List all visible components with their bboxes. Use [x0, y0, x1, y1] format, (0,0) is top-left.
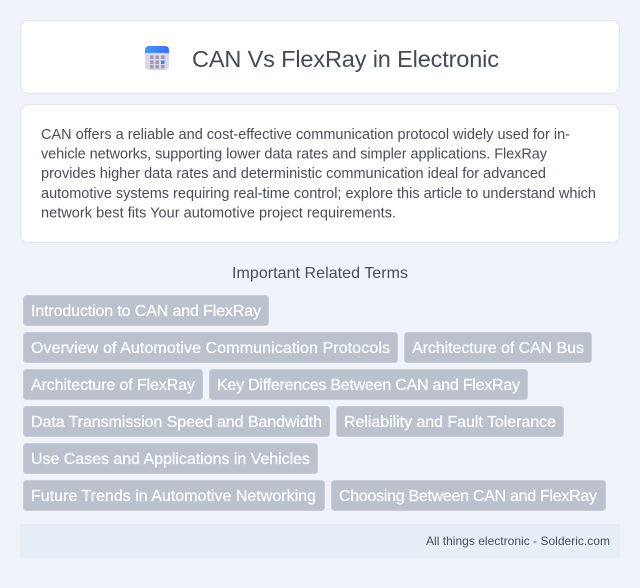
footer — [20, 524, 620, 558]
panel: summary paragraph: network best fits Your automotive project requirements. — [41, 205, 396, 221]
related terms tags: Introduction to CAN and FlexRay — [31, 303, 261, 320]
related terms tags: Data Transmission Speed and Bandwidth — [31, 414, 322, 431]
heading: important related terms: Important Related Terms — [232, 265, 408, 282]
title card — [20, 20, 620, 94]
heading: CAN Vs FlexRay in Electronic — [192, 46, 499, 72]
related terms tags: Architecture of FlexRay — [31, 377, 195, 394]
related terms tags: Future Trends in Automotive Networking — [31, 488, 316, 505]
panel: summary paragraph: CAN offers a reliable and cost-effective communication protocol widely used for in- — [41, 127, 570, 143]
related terms tags — [24, 296, 606, 510]
related terms tags: Choosing Between CAN and FlexRay — [339, 488, 597, 505]
panel: summary paragraph: provides higher data rates and deterministic communication ideal for advanced — [41, 166, 546, 182]
panel: summary paragraph: vehicle networks, supporting lower data rates and simpler applications. FlexRay — [41, 147, 548, 163]
related terms tags: Overview of Automotive Communication Protocols — [31, 340, 390, 357]
related terms tags: Reliability and Fault Tolerance — [344, 414, 556, 431]
icon: calendar — [145, 46, 169, 70]
related terms tags: Use Cases and Applications in Vehicles — [31, 451, 310, 468]
related terms tags: Key Differences Between CAN and FlexRay — [217, 377, 520, 394]
panel: summary paragraph: automotive systems requiring real-time control; explore this article to understand which — [41, 186, 596, 202]
footer: All things electronic - Solderic.com — [426, 534, 610, 548]
related terms tags: Architecture of CAN Bus — [412, 340, 584, 357]
panel: summary paragraph — [20, 104, 620, 242]
